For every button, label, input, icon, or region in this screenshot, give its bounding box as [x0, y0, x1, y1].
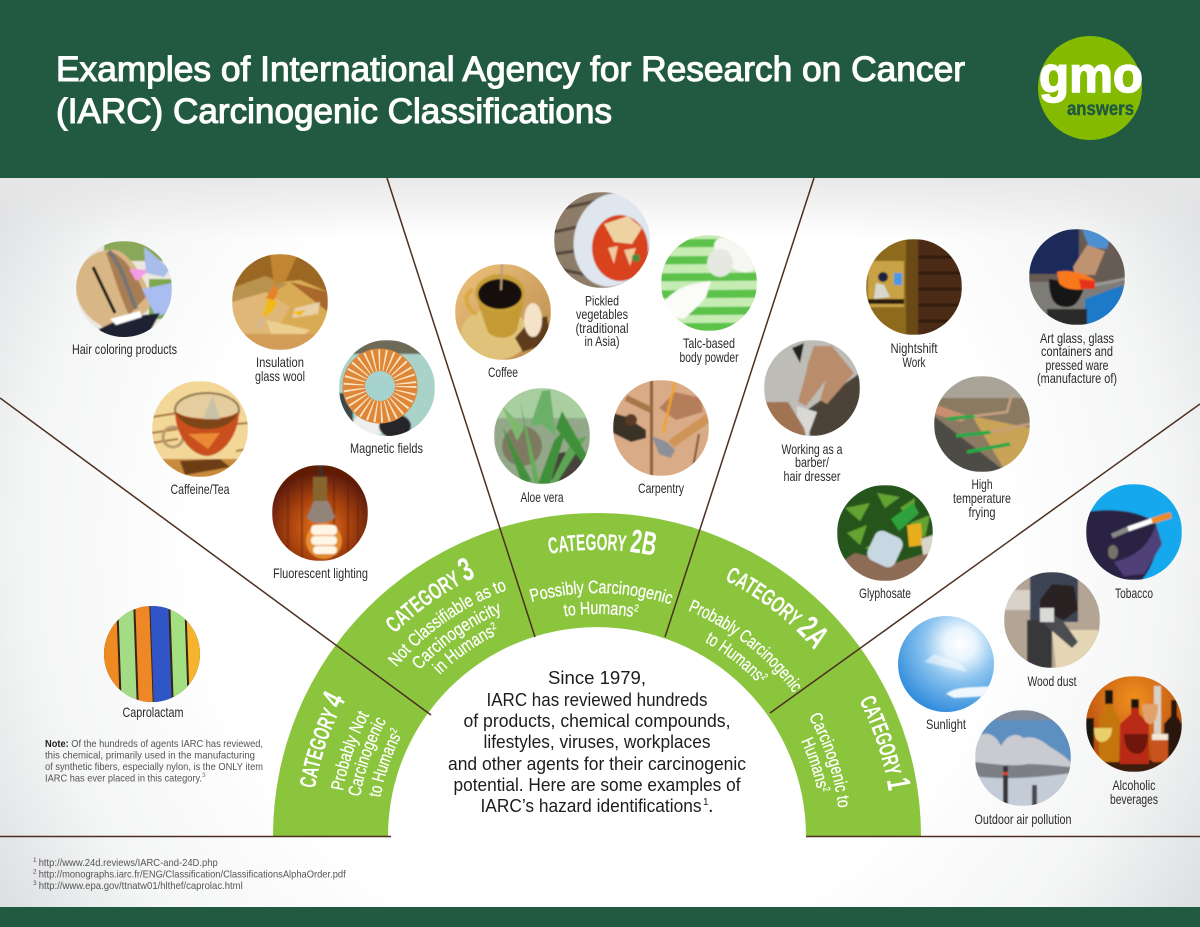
photo: glyphosate	[837, 485, 933, 581]
footer band	[0, 907, 1200, 927]
item: fluorescent lighting	[272, 465, 368, 581]
category 3: in Humans	[431, 628, 494, 674]
photo: alcoholic beverages	[1086, 676, 1182, 772]
label: pickled vegetables: Pickled	[585, 292, 619, 308]
label: insulation: glass wool	[255, 368, 305, 384]
divider lines	[0, 178, 1200, 836]
label: insulation	[255, 354, 305, 384]
footnotes: http://www.24d.reviews/IARC-and-24D.php	[39, 857, 218, 869]
category 3: 2	[490, 622, 496, 630]
label: barber: hair dresser	[784, 468, 841, 484]
label: barber: Working as a	[782, 441, 843, 457]
category 4	[300, 690, 400, 796]
footnotes: http://www.epa.gov/ttnatw01/hlthef/caprolac.html	[39, 880, 243, 892]
item: outdoor air pollution	[974, 710, 1072, 827]
centre text block	[448, 667, 746, 817]
logo: gmo answers: answers	[1067, 99, 1134, 120]
category 2B: to Humans	[563, 602, 634, 617]
category 1	[801, 696, 910, 808]
label: alcoholic beverages: Alcoholic	[1112, 777, 1156, 793]
label: wood dust: Wood dust	[1028, 673, 1077, 689]
item: nightshift work	[866, 239, 962, 370]
label: frying: temperature	[953, 490, 1011, 506]
label: frying: High	[972, 476, 992, 492]
centre text block: IARC’s hazard identifications	[480, 795, 702, 816]
label: talc	[680, 335, 739, 365]
photo: art glass	[1029, 229, 1125, 325]
label: insulation: Insulation	[256, 354, 304, 370]
category 2B	[529, 530, 672, 617]
photo: fluorescent lighting	[272, 465, 368, 561]
footnotes	[33, 857, 346, 892]
item: insulation	[232, 254, 328, 384]
label: art glass: (manufacture of)	[1037, 370, 1117, 386]
photo: pickled vegetables	[554, 192, 650, 288]
photo: tobacco	[1086, 484, 1182, 580]
item: glyphosate	[837, 485, 933, 601]
category 4: Probably Not	[330, 710, 370, 790]
item: pickled vegetables	[554, 192, 650, 349]
label: frying	[953, 476, 1011, 520]
footnotes: 1	[33, 857, 37, 864]
photo: aloe vera	[494, 388, 590, 484]
item: coffee	[455, 264, 551, 380]
page background	[0, 178, 1200, 907]
category 1: 2	[822, 787, 830, 792]
label: carpentry: Carpentry	[638, 480, 684, 496]
centre text block: Since 1979,	[548, 667, 646, 688]
item: hair coloring	[72, 241, 177, 357]
title	[56, 50, 965, 131]
header band	[0, 0, 1200, 178]
label: pickled vegetables: in Asia)	[584, 333, 620, 349]
photo: wood dust	[1004, 572, 1100, 668]
label: alcoholic beverages: beverages	[1110, 791, 1158, 807]
category 1: CATEGORY 1	[861, 696, 910, 791]
category 4: Carcinogenic	[348, 718, 386, 796]
label: alcoholic beverages	[1110, 777, 1158, 807]
item: carpentry	[613, 380, 709, 496]
label: art glass: pressed ware	[1046, 357, 1109, 373]
label: frying: frying	[968, 504, 996, 520]
label: pickled vegetables	[576, 292, 628, 349]
category 2B: CATEGORY 2B	[548, 530, 656, 555]
category 2A	[688, 568, 828, 692]
item: sunlight	[898, 616, 994, 732]
label: magnetic fields: Magnetic fields	[350, 440, 423, 456]
label: nightshift work	[890, 340, 938, 370]
photo: talc	[661, 235, 757, 331]
centre text block: IARC has reviewed hundreds	[486, 689, 708, 710]
photo: caprolactam	[104, 606, 200, 702]
label: talc: Talc-based	[683, 335, 735, 351]
item: art glass	[1029, 229, 1125, 386]
item: wood dust	[1004, 572, 1100, 689]
photo: hair coloring	[76, 241, 172, 339]
item: tobacco	[1086, 484, 1182, 601]
photo: coffee	[455, 264, 551, 360]
item: caprolactam	[104, 606, 200, 720]
category 1: Humans	[801, 736, 826, 788]
centre text block: potential. Here are some examples of	[454, 774, 741, 795]
category 3: Carcinogenicity	[412, 604, 500, 668]
note: of synthetic fibers, especially nylon, is the ONLY item	[45, 761, 263, 773]
title: (IARC) Carcinogenic Classifications	[56, 92, 612, 131]
centre text block: and other agents for their carcinogenic	[448, 753, 746, 774]
label: glyphosate: Glyphosate	[859, 585, 911, 601]
label: art glass	[1037, 330, 1117, 386]
label: barber: barber/	[795, 454, 829, 470]
note: Note: Of the hundreds of agents IARC has reviewed,	[45, 738, 263, 750]
category 2A: Probably Carcinogenic	[688, 600, 800, 692]
photo: nightshift work	[866, 239, 962, 335]
label: hair coloring: Hair coloring products	[72, 341, 177, 357]
label: outdoor air pollution: Outdoor air pollution	[974, 811, 1072, 827]
logo: gmo answers: gmo	[1039, 47, 1143, 103]
label: art glass: Art glass, glass	[1040, 330, 1114, 346]
photo: caffeine	[152, 381, 248, 477]
note: IARC has ever placed in this category.	[45, 772, 202, 784]
label: pickled vegetables: (traditional	[576, 320, 628, 336]
category 3: CATEGORY 3	[386, 558, 474, 632]
note	[45, 738, 263, 784]
label: pickled vegetables: vegetables	[576, 306, 628, 322]
category 2A: 2	[761, 674, 768, 680]
footnotes: 3	[33, 880, 37, 887]
category 4: 2	[390, 728, 398, 734]
label: aloe vera: Aloe vera	[520, 489, 564, 505]
photo: frying	[934, 376, 1030, 472]
label: tobacco: Tobacco	[1115, 585, 1153, 601]
label: coffee: Coffee	[488, 364, 518, 380]
photo: sunlight	[898, 616, 994, 712]
arch: category semicircle	[273, 513, 921, 836]
label: fluorescent lighting: Fluorescent lighting	[273, 565, 368, 581]
category 2B: Possibly Carcinogenic	[529, 580, 672, 604]
centre text block: of products, chemical compounds,	[464, 710, 730, 731]
item: caffeine	[152, 381, 248, 497]
photo: magnetic fields	[339, 340, 435, 438]
category 3: Not Classifiable as to	[388, 582, 506, 667]
note: this chemical, primarily used in the manufacturing	[45, 750, 255, 762]
item: talc	[659, 231, 762, 365]
centre text block: lifestyles, viruses, workplaces	[484, 731, 710, 752]
label: nightshift work: Nightshift	[890, 340, 938, 356]
title: Examples of International Agency for Research on Cancer	[56, 50, 965, 89]
category 4: to Humans	[369, 734, 400, 796]
category 2A: to Humans	[706, 632, 762, 680]
photo: outdoor air pollution	[975, 710, 1071, 806]
logo: gmo answers	[1038, 36, 1143, 140]
item: frying	[934, 376, 1030, 520]
footnotes: http://monographs.iarc.fr/ENG/Classification/ClassificationsAlphaOrder.pdf	[39, 868, 346, 880]
label: caprolactam: Caprolactam	[122, 704, 184, 720]
photo: carpentry	[613, 380, 709, 476]
label: caffeine: Caffeine/Tea	[170, 481, 230, 497]
label: talc: body powder	[680, 349, 739, 365]
note: 3	[202, 772, 206, 779]
footnotes: 2	[33, 868, 37, 876]
item: alcoholic beverages	[1086, 676, 1182, 807]
category 2B: 2	[634, 604, 639, 612]
item: aloe vera	[494, 388, 590, 505]
centre text block: 1	[703, 797, 709, 808]
label: barber	[782, 441, 843, 484]
item: barber	[764, 340, 860, 484]
label: sunlight: Sunlight	[926, 716, 966, 732]
label: art glass: containers and	[1041, 343, 1113, 359]
category 2A: CATEGORY 2A	[727, 568, 828, 650]
photo: insulation	[232, 254, 328, 350]
photo: barber	[764, 340, 860, 436]
centre text block: .	[708, 795, 714, 817]
category 1: Carcinogenic to	[810, 713, 849, 808]
category 4: CATEGORY 4	[300, 690, 345, 787]
item: magnetic fields	[339, 340, 435, 456]
label: nightshift work: Work	[902, 354, 926, 370]
